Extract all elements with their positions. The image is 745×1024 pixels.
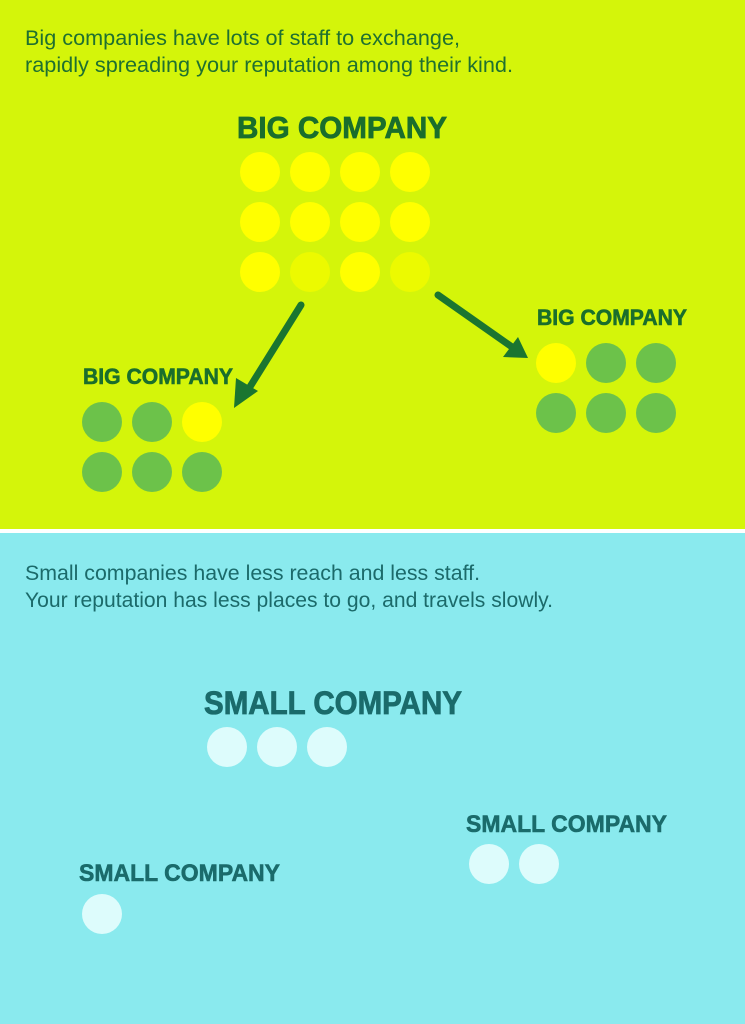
- heading: main big company: BIG COMPANY: [237, 110, 447, 145]
- panel: small companies: [0, 533, 745, 1024]
- heading: right big company: BIG COMPANY: [537, 305, 687, 330]
- staff grid: right big company: [536, 343, 676, 433]
- staff grid: main big company: [240, 152, 430, 292]
- arrow: to right company: [438, 295, 528, 358]
- staff: right small company: [469, 844, 559, 884]
- heading: main small company: SMALL COMPANY: [204, 685, 462, 721]
- heading: left big company: BIG COMPANY: [83, 364, 233, 389]
- staff: left small company: [82, 894, 122, 934]
- intro text big: Big companies have lots of staff to exchange,: [25, 27, 460, 50]
- intro text big: rapidly spreading your reputation among their kind.: [25, 54, 513, 77]
- intro text small: [25, 562, 553, 612]
- intro text small: Your reputation has less places to go, and travels slowly.: [25, 589, 553, 612]
- heading: left small company: SMALL COMPANY: [79, 860, 280, 887]
- intro text big: [25, 27, 513, 77]
- staff grid: left big company: [82, 402, 222, 492]
- heading: right small company: SMALL COMPANY: [466, 811, 667, 838]
- panel: big companies: [0, 0, 745, 529]
- staff: main small company: [207, 727, 347, 767]
- intro text small: Small companies have less reach and less staff.: [25, 562, 480, 585]
- arrow: to left company: [234, 305, 301, 408]
